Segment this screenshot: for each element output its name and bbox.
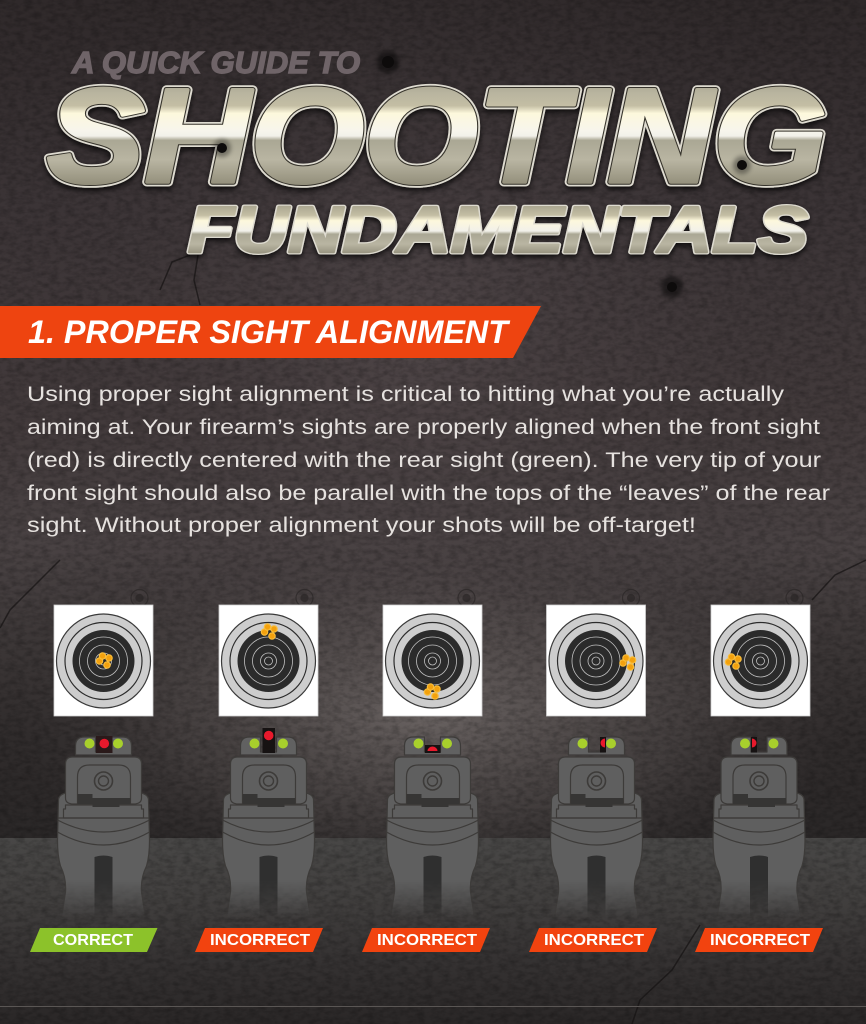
label: incorrect: INCORRECT: [210, 932, 310, 949]
pistol: front sight too far left: [713, 737, 805, 918]
column: front sight high: [195, 590, 323, 952]
pistol: sights aligned: [58, 736, 150, 918]
label: correct: CORRECT: [53, 932, 133, 949]
body paragraph: sight. Without proper alignment your shots will be off-target!: [27, 513, 696, 537]
body paragraph: Using proper sight alignment is critical to hitting what you’re actually: [27, 382, 784, 406]
body paragraph: aiming at. Your firearm’s sights are properly aligned when the front sight: [27, 415, 820, 439]
title: fundamentals: FUNDAMENTALS: [188, 193, 808, 266]
label: incorrect: INCORRECT: [544, 932, 644, 949]
label: correct: [30, 928, 158, 952]
target: high group: [219, 590, 318, 716]
label: incorrect: INCORRECT: [710, 932, 810, 949]
target: left group: [711, 590, 810, 716]
title: shooting: SHOOTING: [47, 62, 827, 211]
label: incorrect: [362, 928, 490, 952]
body paragraph: (red) is directly centered with the rear sight (green). The very tip of your: [27, 448, 821, 472]
label: incorrect: [529, 928, 657, 952]
section banner: [0, 306, 541, 358]
body paragraph: [27, 382, 830, 537]
column: front sight right: [529, 590, 657, 952]
pistol: front sight too low: [386, 737, 478, 918]
section banner: 1. PROPER SIGHT ALIGNMENT: [28, 314, 510, 350]
label: incorrect: [195, 928, 323, 952]
column: front sight low: [362, 590, 490, 952]
target: centered group: [54, 590, 153, 716]
title: shooting: SHOOTING: [47, 62, 827, 211]
title: a quick guide to: A QUICK GUIDE TO: [71, 45, 360, 80]
column: correct: [30, 590, 158, 952]
label: incorrect: INCORRECT: [377, 932, 477, 949]
body paragraph: front sight should also be parallel with the tops of the “leaves” of the rear: [27, 481, 830, 505]
label: incorrect: [695, 928, 823, 952]
target: low group: [383, 590, 482, 716]
target: right group: [546, 590, 646, 716]
pistol: front sight too high: [222, 728, 314, 918]
bullet holes: [377, 51, 683, 298]
title: shooting: SHOOTING: [47, 62, 827, 211]
title: fundamentals: FUNDAMENTALS: [188, 193, 808, 266]
pistol: front sight too far right: [550, 737, 642, 918]
column: front sight left: [695, 590, 823, 952]
